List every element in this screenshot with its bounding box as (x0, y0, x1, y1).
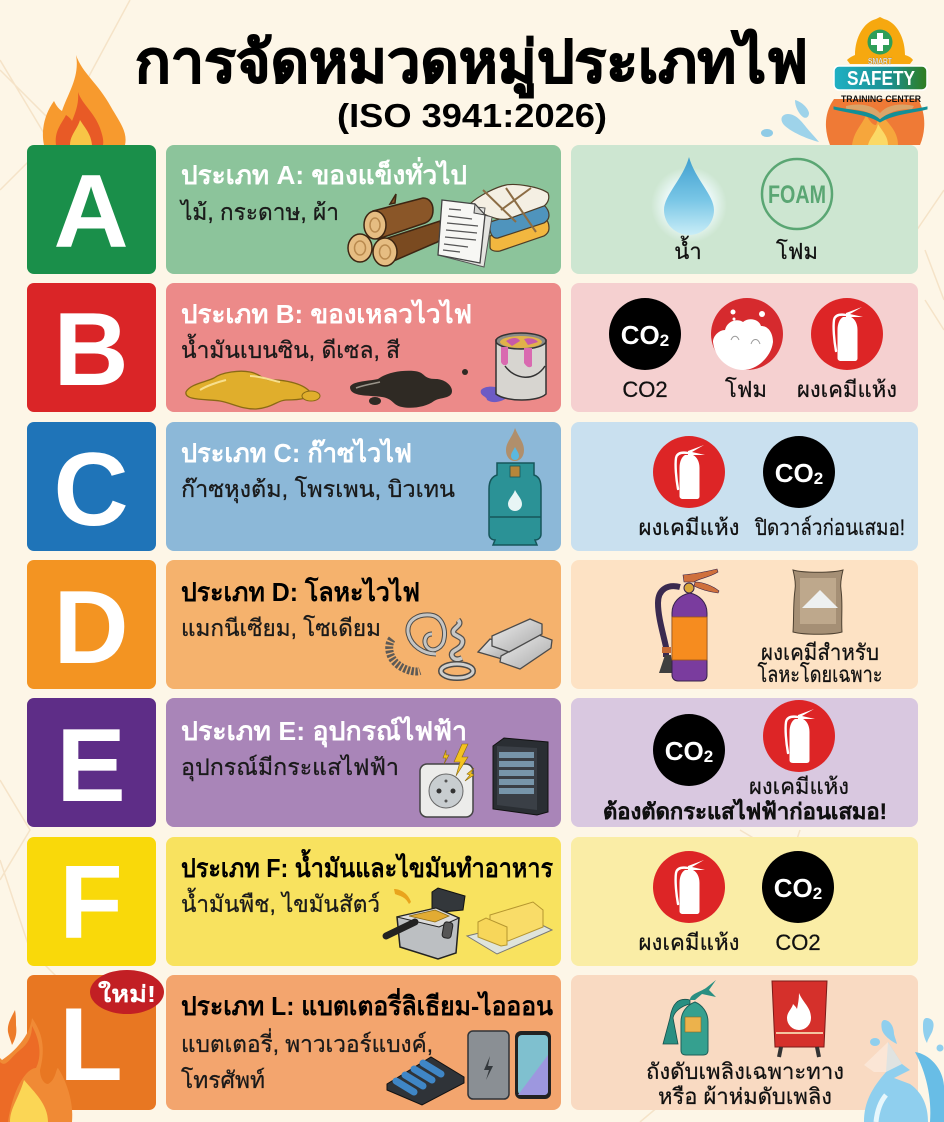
icon: CO2: CO (774, 873, 813, 903)
panel: class E description: อุปกรณ์มีกระแสไฟฟ้า (181, 754, 399, 781)
icon: CO2: CO (665, 736, 704, 766)
label: foam: โฟม (725, 377, 767, 402)
letter tile C: C (53, 432, 129, 548)
letter tile L: L (59, 987, 123, 1103)
icon: sparks (443, 744, 474, 781)
label: dry powder: ผงเคมีแห้ง (638, 515, 740, 540)
decoration: flame bottom left (0, 1010, 72, 1122)
letter tile B: B (53, 292, 129, 408)
row: class B (27, 283, 918, 412)
icon: foam circle: FOAM (768, 181, 826, 209)
panel: class D description (166, 560, 561, 689)
title: การจัดหมวดหมู่ประเภทไฟ (135, 29, 808, 98)
icon: class D extinguisher (658, 569, 719, 681)
letter tile L (27, 975, 156, 1110)
icon: battery charger (387, 1057, 464, 1105)
panel: class F description: ประเภท F: น้ำมันและไขมันทำอาหาร (181, 848, 553, 883)
icon: paint can (481, 333, 546, 402)
letter tile A (27, 145, 156, 274)
label: specialty extinguisher or blanket (646, 1059, 844, 1109)
label: dry powder: ผงเคมีแห้ง (749, 774, 849, 799)
logo: Smart Safety Training Center (834, 17, 927, 122)
panel: class D description: ประเภท D: โลหะไวไฟ (181, 576, 420, 607)
label: dry powder: ผงเคมีแห้ง (638, 930, 740, 955)
panel: class C extinguishing agents (571, 422, 918, 551)
icon: power socket (420, 764, 473, 817)
icon: CO2: 2 (704, 747, 713, 766)
decoration: flame top left (43, 55, 126, 145)
icon: dry powder extinguisher (653, 436, 725, 508)
panel: class L description (166, 975, 561, 1110)
icon: metal shavings (389, 615, 473, 678)
row: class A (27, 145, 918, 274)
letter tile B (27, 283, 156, 412)
panel: class A extinguishing agents (571, 145, 918, 274)
row: class C (27, 422, 918, 551)
letter tile E: E (56, 708, 126, 824)
panel: class A description: ไม้, กระดาษ, ผ้า (179, 199, 339, 225)
icon: diesel puddle (350, 369, 468, 408)
panel: class E extinguishing agents (571, 698, 918, 827)
logo: Smart Safety Training Center: SAFETY (847, 68, 916, 90)
badge: new (90, 970, 164, 1014)
label: foam: โฟม (776, 239, 818, 264)
panel: class C description: ก๊าซหุงต้ม, โพรเพน, บิวเทน (181, 476, 455, 503)
panel: class B description: ประเภท B: ของเหลวไวไฟ (181, 298, 472, 329)
panel: class C description: ประเภท C: ก๊าซไวไฟ (181, 437, 412, 468)
row: class F (27, 837, 918, 966)
panel: class E description (166, 698, 561, 827)
badge: new: ใหม่! (98, 980, 156, 1007)
letter tile F (27, 837, 156, 966)
letter tile D (27, 560, 156, 689)
panel: class A description (166, 145, 561, 274)
icon: water drop (651, 157, 727, 243)
icon: CO2: CO (775, 458, 814, 488)
panel: class B description (166, 283, 561, 412)
icon: server rack (493, 738, 548, 815)
label: specialty extinguisher or blanket: ถังดับเพลิงเฉพาะทาง (646, 1059, 844, 1084)
icon: paper sheets (438, 200, 492, 267)
icon: CO2 (763, 436, 835, 508)
label: cut power first: ต้องตัดกระแสไฟฟ้าก่อนเสมอ! (603, 798, 887, 824)
logo: Smart Safety Training Center: SMART (868, 57, 892, 66)
row: class D (27, 560, 918, 689)
icon: wood logs (348, 194, 441, 266)
row: class E (27, 698, 918, 827)
label: close valve first: ปิดวาล์วก่อนเสมอ! (754, 515, 905, 540)
icon: gas cylinder with flame (489, 428, 541, 545)
icon: foam (711, 298, 783, 370)
icon: butter (467, 902, 552, 954)
icon: fuel puddle (186, 371, 320, 409)
icon: foam circle (762, 159, 832, 229)
icon: powder bag (793, 570, 843, 634)
icon: dry powder extinguisher (811, 298, 883, 370)
icon: folded cloth (470, 184, 549, 251)
decoration: flame top right (826, 99, 924, 145)
icon: CO2: 2 (814, 469, 823, 488)
letter tile D: D (53, 570, 129, 686)
label: water: น้ำ (674, 236, 702, 264)
panel: class B description: น้ำมันเบนซิน, ดีเซล, สี (181, 334, 400, 363)
decoration: water splash top right (761, 100, 819, 142)
icon: specialty extinguisher (663, 980, 716, 1055)
letter tile E (27, 698, 156, 827)
icon: dry powder extinguisher (653, 851, 725, 923)
letter tile C (27, 422, 156, 551)
panel: class L description: โทรศัพท์ (181, 1067, 265, 1093)
panel: class E description: ประเภท E: อุปกรณ์ไฟฟ้า (181, 715, 467, 748)
subtitle: (ISO 3941:2026) (337, 97, 607, 134)
icon: CO2: 2 (813, 884, 822, 903)
icon: CO2 (653, 714, 725, 786)
icon: CO2 (762, 851, 834, 923)
icon: CO2: 2 (660, 331, 669, 350)
panel: class L description: แบตเตอรี่, พาวเวอร์แบงค์, (181, 1028, 433, 1057)
panel: class D description: แมกนีเซียม, โซเดียม (181, 615, 381, 641)
panel: class F description: น้ำมันพืช, ไขมันสัตว์ (181, 888, 380, 917)
decoration: water splash bottom right (864, 1018, 944, 1122)
panel: class D extinguishing agents (571, 560, 918, 689)
icon: smartphone (515, 1031, 551, 1099)
icon: metal ingots (478, 619, 552, 669)
panel: class F description (166, 837, 561, 966)
logo: Smart Safety Training Center: TRAINING CENTER (841, 94, 921, 105)
label: CO2: CO2 (775, 930, 821, 955)
row: class L (27, 970, 918, 1110)
label: metal powder: โลหะโดยเฉพาะ (758, 662, 882, 687)
panel: class C description (166, 422, 561, 551)
panel: class B extinguishing agents (571, 283, 918, 412)
icon: dry powder extinguisher (763, 700, 835, 772)
label: specialty extinguisher or blanket: หรือ ผ้าห่มดับเพลิง (658, 1084, 832, 1109)
panel: class F extinguishing agents (571, 837, 918, 966)
icon: power bank (468, 1031, 509, 1099)
icon: CO2 (609, 298, 681, 370)
letter tile A: A (53, 154, 129, 270)
icon: CO2: CO (621, 320, 660, 350)
panel: class L extinguishing agents (571, 975, 918, 1110)
icon: fire blanket (772, 981, 827, 1057)
panel: class A description: ประเภท A: ของแข็งทั่วไป (181, 156, 467, 190)
label: dry powder: ผงเคมีแห้ง (797, 377, 897, 402)
panel: class L description: ประเภท L: แบตเตอรี่ลิเธียม-ไอออน (181, 987, 553, 1021)
letter tile F: F (59, 845, 123, 961)
label: metal powder: ผงเคมีสำหรับ (761, 640, 879, 665)
label: metal powder (758, 640, 882, 687)
icon: deep fryer (386, 888, 465, 959)
label: CO2: CO2 (622, 377, 668, 402)
